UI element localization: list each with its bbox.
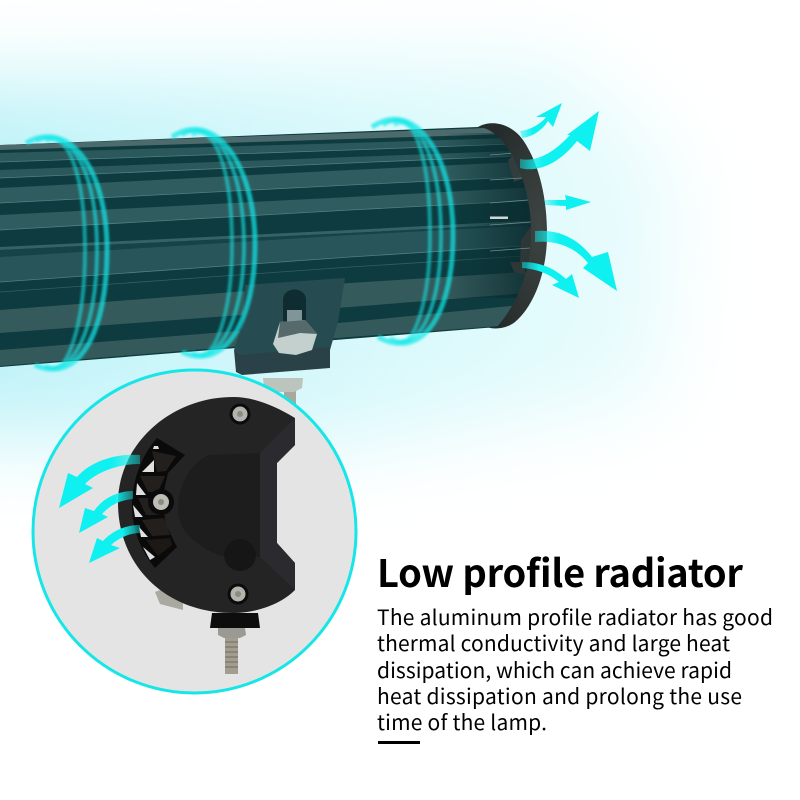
lamp screw top (230, 404, 250, 424)
aluminium body (0, 120, 545, 370)
ring middle (172, 129, 255, 356)
inset disc (33, 370, 356, 693)
heading: Low profile radiator (377, 543, 743, 598)
end cap (470, 123, 547, 328)
arrow two (79, 491, 133, 533)
accent underline (378, 741, 420, 744)
body text: heat dissipation and prolong the use (377, 681, 742, 711)
lamp screw bottom (228, 584, 248, 604)
panel: LED bar with heat-sink fins (0, 120, 547, 370)
exhaust arrows in inset (59, 455, 140, 563)
exhaust arrows at bar end (520, 103, 617, 298)
arrow up large (520, 111, 599, 169)
arrow up small (520, 103, 562, 138)
vent window and fins (132, 438, 185, 568)
body text: time of the lamp. (377, 707, 547, 737)
body text: dissipation, which can achieve rapid (377, 655, 732, 685)
arrow down small (522, 262, 579, 298)
arrow one (59, 455, 140, 508)
ring right (372, 119, 453, 343)
cyan glow behind the bar (0, 60, 680, 450)
arrow straight (545, 195, 591, 210)
arrow down large (535, 231, 617, 291)
ring left (26, 137, 107, 369)
mounting bracket with hex bolt (234, 278, 345, 375)
body text (377, 602, 773, 737)
lamp rear housing (118, 397, 295, 674)
arrow three (89, 525, 140, 563)
airflow rings around the bar (26, 119, 453, 369)
body text: The aluminum profile radiator has good (377, 602, 773, 632)
lamp screw centre (148, 489, 174, 515)
panel: inset circle, rear view of lamp (33, 370, 356, 693)
bolt below the bar bracket (263, 378, 303, 405)
body text: thermal conductivity and large heat (377, 628, 730, 658)
